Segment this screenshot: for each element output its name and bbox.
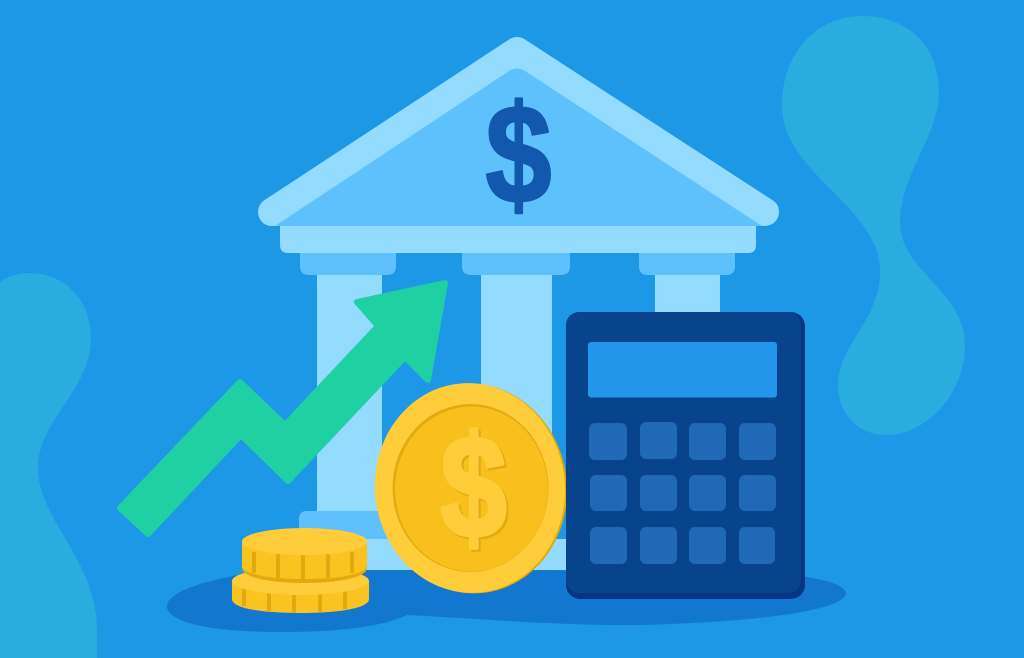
large coin	[365, 374, 577, 603]
calculator screen	[588, 342, 777, 398]
upper coin shadow rim	[242, 542, 367, 583]
ground shadow	[167, 568, 846, 632]
base step	[299, 511, 540, 539]
roof	[272, 51, 765, 233]
coin edge	[367, 374, 577, 603]
coin face	[365, 374, 575, 602]
lower coin side	[232, 581, 369, 613]
coin inner ring	[392, 404, 548, 572]
dollar sign on pediment: $	[485, 76, 552, 233]
column: right	[655, 275, 720, 315]
coin stack	[232, 528, 369, 613]
lower coin ribs	[244, 584, 345, 613]
column: left	[317, 275, 382, 515]
lower coin top	[232, 567, 369, 595]
calculator face	[566, 312, 801, 593]
calculator keys	[589, 422, 776, 564]
roof outer	[272, 51, 765, 212]
upper coin side	[242, 542, 367, 579]
coin dollar shadow: $	[442, 409, 509, 571]
column: middle	[481, 275, 552, 515]
upper coin top	[242, 528, 367, 555]
entablature	[280, 226, 756, 253]
growth arrow	[120, 283, 445, 534]
coin inner face	[395, 406, 548, 572]
coin dollar: $	[440, 407, 507, 569]
capital: middle	[462, 253, 570, 275]
lower coin	[232, 567, 369, 613]
pediment	[275, 68, 762, 226]
capital: right	[639, 253, 735, 275]
capital: left	[300, 253, 396, 275]
background blob: left	[0, 273, 97, 658]
bank building	[272, 51, 765, 570]
upper coin	[242, 528, 367, 583]
base plinth	[285, 539, 566, 570]
upper coin ribs	[254, 552, 352, 579]
background blob: right	[782, 16, 965, 435]
calculator	[566, 312, 805, 599]
calculator body edge	[566, 312, 805, 599]
